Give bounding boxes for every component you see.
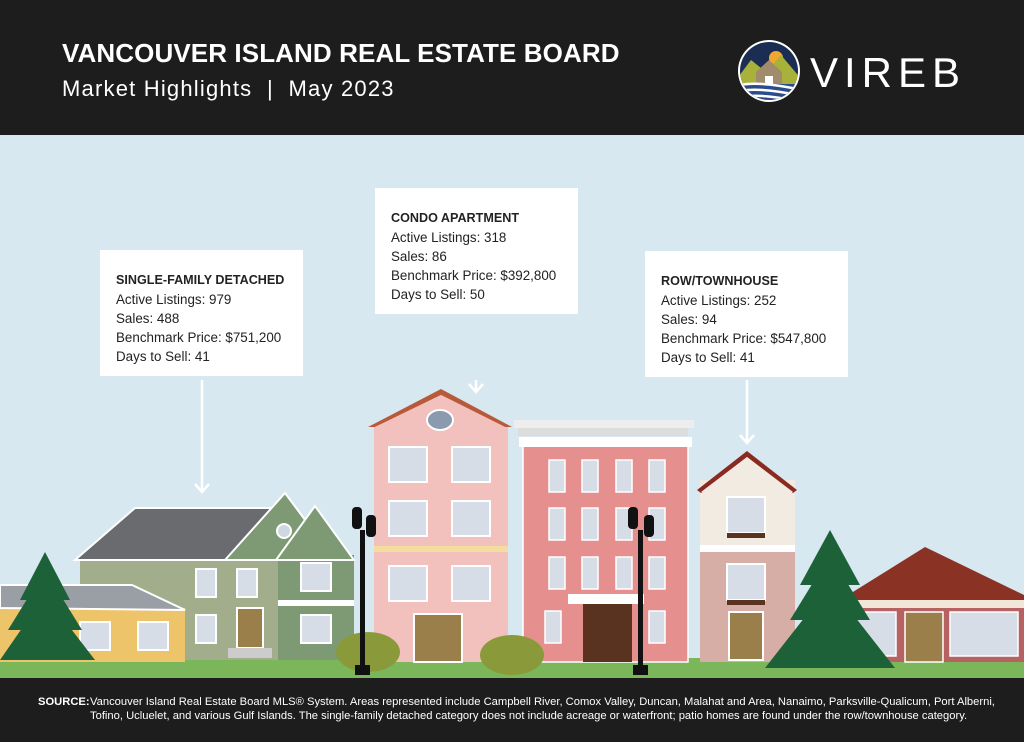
building: red roof house — [840, 547, 1024, 662]
scene illustration — [0, 380, 1024, 678]
building: beige townhouse — [697, 451, 797, 662]
callout: row/townhouse: Active Listings: 252 — [661, 293, 776, 308]
callout: row/townhouse: Days to Sell: 41 — [661, 350, 755, 365]
tree right — [765, 530, 895, 668]
header — [0, 0, 1024, 135]
callout: condo apartment: Active Listings: 318 — [391, 230, 506, 245]
callout: row/townhouse: ROW/TOWNHOUSE — [661, 274, 778, 288]
logo — [738, 40, 966, 102]
arrows — [195, 378, 754, 492]
logo: VIREB — [810, 49, 966, 96]
callout: row/townhouse: Benchmark Price: $547,800 — [661, 331, 826, 346]
callout: condo apartment: Sales: 86 — [391, 249, 447, 264]
ground — [0, 658, 1024, 678]
callout: row/townhouse — [645, 251, 848, 377]
bushes — [336, 632, 544, 675]
building: pink condo — [368, 389, 512, 662]
tree left — [0, 552, 95, 660]
callout: single-family detached: Benchmark Price: $751,200 — [116, 330, 281, 345]
building: green house — [75, 493, 354, 660]
callout: single-family detached: Sales: 488 — [116, 311, 179, 326]
footer source note: Tofino, Ucluelet, and various Gulf Islands. The single-family detached category does not include acreage or waterfront; patio homes are found under the row/townhouse category. — [90, 710, 967, 722]
callout: single-family detached: Active Listings: 979 — [116, 292, 231, 307]
subtitle: Market Highlights | May 2023 — [62, 76, 395, 101]
footer source note: SOURCE: — [38, 696, 90, 708]
street lamps — [352, 507, 654, 675]
callout: condo apartment: Days to Sell: 50 — [391, 287, 485, 302]
callout: row/townhouse: Sales: 94 — [661, 312, 717, 327]
building: red apartment — [514, 420, 694, 662]
building: yellow house — [0, 585, 185, 662]
callout: condo apartment — [375, 188, 578, 314]
footer source note — [0, 678, 1024, 742]
callout: condo apartment: CONDO APARTMENT — [391, 211, 519, 225]
title: VANCOUVER ISLAND REAL ESTATE BOARD — [62, 38, 620, 68]
callout: single-family detached: Days to Sell: 41 — [116, 349, 210, 364]
callout: condo apartment: Benchmark Price: $392,800 — [391, 268, 556, 283]
callout: single-family detached — [100, 250, 303, 376]
footer source note: Vancouver Island Real Estate Board MLS® System. Areas represented include Campbell River, Comox Valley, Duncan, Malahat and Area, Nanaimo, Parksville-Qualicum, Port Alberni, — [90, 696, 995, 708]
callout: single-family detached: SINGLE-FAMILY DETACHED — [116, 273, 284, 287]
